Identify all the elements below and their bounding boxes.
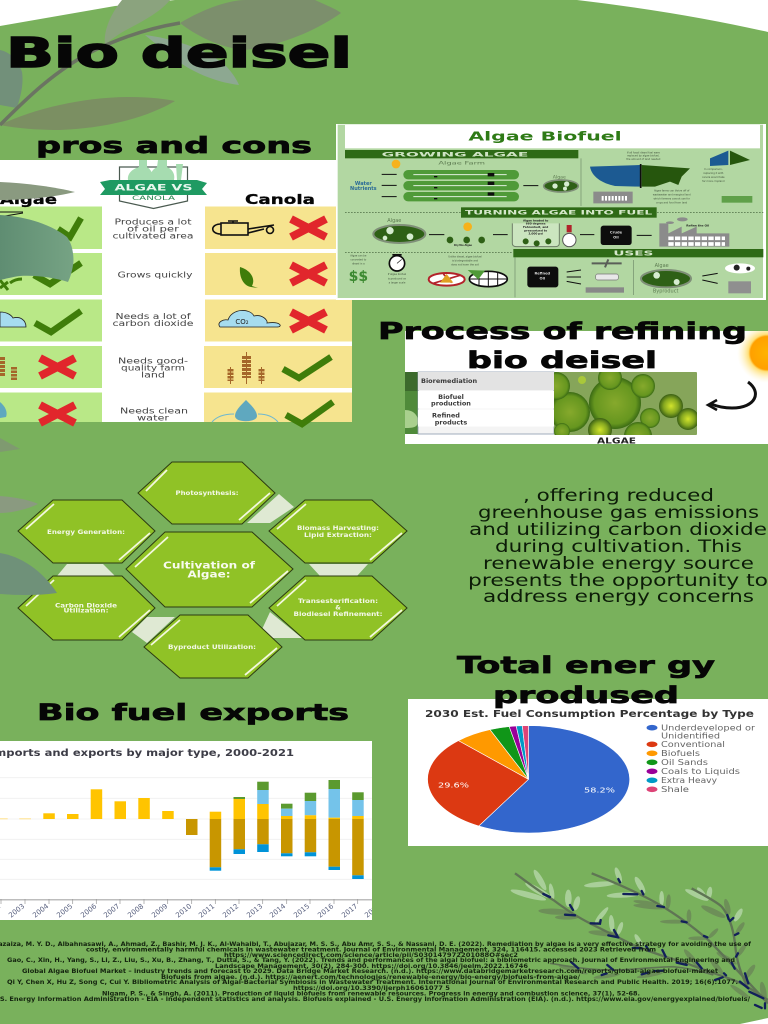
algae farm diagram: Algae Farm [438, 160, 486, 166]
x axis: 2013 [245, 902, 264, 920]
hexagon: cultivation of algae [126, 532, 293, 607]
row labels: of oil per [127, 224, 180, 234]
us map comparison: which farmers cannot use for [653, 197, 691, 201]
x axis: 2007 [102, 902, 121, 920]
legend [646, 724, 756, 794]
legend: Coals to Liquids [661, 767, 740, 776]
hexagon: transesterification and refinement: Transesterification: [298, 597, 378, 605]
icon: canola leaf [240, 267, 258, 288]
facts with stopwatch and icons: Algae can be [350, 254, 367, 258]
badge: algae vs canola: ALGAE VS [114, 184, 192, 194]
text block: references: https://doi.org/10.3390/ijerph16061077 5 [293, 984, 450, 992]
image: algae cells [554, 372, 697, 435]
pie chart: 58.2% [584, 786, 615, 794]
text block: references: Qi Y, Chen X, Hu Z, Song C, Cui Y. Bibliometric Analysis of Algal-Bacterial Symbiosis in Wastewater Treatment. International Journal of Environmental Research and Public Health. 2019; 16(6):1077. [7, 978, 738, 986]
us map comparison: canola would take [702, 175, 725, 179]
right column rows [204, 206, 352, 422]
row labels: land [141, 370, 165, 380]
fuel process diagram: pressurized to [524, 228, 547, 232]
legend: Oil Sands [661, 758, 708, 767]
uses diagram [515, 257, 755, 297]
fuel process diagram: Algae [387, 218, 401, 224]
facts with stopwatch and icons: is produced on [388, 276, 407, 280]
algae farm diagram: Algae [553, 175, 566, 181]
fuel process diagram: Oil [613, 236, 619, 240]
text block: references: https://www.sciencedirect.com/science/article/pii/S030147972201088O#sec2 [224, 951, 518, 959]
us map comparison [590, 150, 752, 205]
icon: wheat [1, 352, 262, 384]
row labels: water [137, 414, 170, 422]
hexagon: transesterification and refinement [269, 576, 407, 640]
hexagon: biomass harvesting [269, 500, 407, 563]
heading: Total energy produced: prodused [493, 683, 679, 709]
x axis: 2009 [150, 902, 169, 920]
x axis: 2008 [126, 902, 145, 920]
algae farm diagram: Nutrients [350, 186, 377, 192]
facts with stopwatch and icons: converted to [350, 258, 367, 262]
table: bioremediation steps: production [431, 400, 471, 408]
fuel process diagram [373, 217, 729, 247]
x axis: 2005 [55, 902, 74, 920]
table: bioremediation steps: Biofuel [438, 393, 464, 401]
panel: fuel consumption pie chart [408, 699, 768, 846]
text block: references: costly, environmentally harmful chemicals in wastewater treatment. Journal of Environmental Management, 324, 116415. accessed 2023 Retrieved from [86, 946, 656, 954]
icons: checks [34, 218, 333, 424]
panel: algae vs canola comparison [0, 160, 352, 424]
small leaf overlay [0, 182, 75, 200]
section bar: growing algae [345, 150, 578, 158]
icon: co2 cloud [219, 310, 280, 327]
algae farm diagram [350, 160, 578, 201]
uses diagram: Byproduct [653, 289, 678, 295]
icon: water drop [0, 400, 278, 422]
panel: algae biofuel infographic [336, 124, 766, 300]
facts with stopwatch and icons: Unlike diesel, algae biofuel [448, 255, 482, 259]
text block: references: Alazaiza, M. Y. D., Albahnasawi, A., Ahmad, Z., Bashir, M. J. K., Al-Wahaibi, T., Abujazar, M. S. S., Abu Amr, S. S., & Nassani, D. E. (2022). Remediation by algae is a very effective strategy for avoiding the use of [0, 940, 751, 948]
heading: Process of refining bio deisel: Process of refining [378, 319, 747, 345]
legend: Unidentified [661, 732, 720, 740]
leaf over carbon dioxide hexagon [0, 553, 57, 595]
icon: sun [738, 331, 768, 382]
decorative branch with leaves behind title [0, 0, 341, 130]
us map comparison: In comparison, [704, 167, 723, 171]
stems [515, 873, 768, 1003]
section bar: uses [513, 249, 763, 258]
x axis: 2010 [174, 902, 193, 920]
x axis: 2017 [340, 902, 359, 920]
facts with stopwatch and icons [349, 254, 507, 287]
hexagon: biomass harvesting: Biomass Harvesting: [297, 524, 379, 532]
text block: benefits paragraph [468, 486, 768, 607]
navy buds [543, 879, 765, 1008]
facts with stopwatch and icons: diesel in a [352, 262, 365, 266]
badge: algae vs canola [100, 160, 207, 208]
x axis: 2004 [31, 902, 51, 920]
legend: Biofuels [661, 749, 700, 758]
heading: Total energy produced: Total ener gy [457, 653, 715, 679]
facts with stopwatch and icons: a larger scale [389, 281, 406, 285]
x axis: 2016 [316, 902, 336, 920]
us map comparison: replaced by algae biofuel, [627, 154, 660, 158]
row labels: quality farm [121, 364, 185, 372]
uses diagram: Oil [540, 276, 545, 280]
us map comparison: the amount of land needed [626, 157, 661, 161]
hexagon: carbon dioxide utilization: Carbon Dioxide [55, 602, 118, 610]
decorative leaves at left middle [0, 438, 38, 513]
fuel process diagram: Dry the Algae [454, 244, 472, 247]
table: bioremediation steps [405, 372, 554, 434]
text block: references: Biofuels from algae. (n.d.). https://aenert.com/technologies/renewable-energy/bio-energy/biofuels-from-algae/ [161, 973, 581, 981]
us map comparison: If all fossil diesel fuel were [627, 150, 660, 154]
us map comparison: Algae farms can thrive off of [654, 189, 689, 193]
icon: oil can [213, 221, 274, 235]
text block: benefits paragraph: greenhouse gas emissions [478, 503, 759, 523]
icons: crosses [40, 219, 326, 423]
text block: references: Nigam, P. S., & Singh, A. (2011). Production of liquid biofuels from renewable resources. Progress in energy and combustion science, 37(1), 52-68. [102, 990, 640, 998]
fuel process diagram: Algae heated to [523, 218, 548, 222]
row labels: Needs clean [120, 406, 188, 416]
hexagon: photosynthesis: Photosynthesis: [176, 489, 238, 497]
text block: benefits paragraph: during cultivation. This [495, 537, 742, 557]
text block: benefits paragraph: presents the opportunity to [468, 571, 768, 591]
x axis [0, 899, 372, 918]
hexagon: cultivation of algae: Cultivation of [163, 560, 256, 572]
row labels: carbon dioxide [112, 319, 194, 328]
fuel process diagram: Refine the Oil [686, 224, 709, 228]
dark leaves [538, 894, 768, 1002]
heading: Process of refining bio deisel: bio deisel [467, 348, 657, 374]
large leaf overlay [0, 215, 73, 282]
facts with stopwatch and icons: If algae biofuel [388, 272, 407, 276]
algae farm diagram: Water [355, 181, 372, 187]
icons: left column partial art [0, 212, 23, 290]
chart title: 2030 Est. Fuel Consumption Percentage by Type [425, 709, 754, 720]
text block: references: Landscape Management, 30(2), 284-300. https://doi.org/10.3846/jeelm.2022.16746 [215, 962, 529, 970]
text block: references [0, 940, 751, 1003]
hexagon: transesterification and refinement: & [335, 604, 341, 612]
heading: Bio deisel: Bio deisel [6, 29, 352, 77]
label: algae: ALGAE [597, 436, 636, 446]
hexagon: photosynthesis [138, 462, 275, 524]
hexagon: byproduct utilization: Byproduct Utilization: [168, 643, 256, 651]
x axis: 2003 [7, 902, 26, 920]
row labels: Needs good- [118, 356, 188, 366]
section bar: growing algae: GROWING ALGAE [382, 151, 528, 158]
arrow: cycle [708, 382, 755, 410]
text block: benefits paragraph: and utilizing carbon dioxide [469, 520, 767, 540]
heading: Process of refining bio deisel [378, 319, 747, 374]
column heading: Canola: Canola [245, 192, 315, 208]
legend: Underdeveloped or [661, 724, 756, 732]
legend: Conventional [661, 740, 725, 749]
connectors between hexagons [57, 494, 368, 643]
pale leaves [510, 867, 744, 947]
row labels: Needs a lot of [116, 312, 191, 321]
legend: Extra Heavy [661, 776, 717, 785]
hexagon: energy generation [18, 500, 155, 563]
x axis: 2012 [221, 902, 240, 920]
facts with stopwatch and icons: is biodegradable and [452, 259, 478, 263]
section bar: uses: USES [613, 250, 654, 258]
hexagon: transesterification and refinement: Biodiesel Refinement: [294, 610, 382, 618]
x axis: 2018 [363, 902, 382, 920]
x axis: 2006 [79, 902, 99, 920]
hexagon: byproduct utilization [144, 615, 282, 678]
table: bioremediation steps: products [435, 418, 467, 426]
us map comparison: far more cropland [702, 179, 725, 183]
text block: benefits paragraph: address energy concerns [483, 587, 754, 607]
text block: benefits paragraph: renewable energy source [483, 554, 754, 574]
section bar: turning algae into fuel: TURNING ALGAE INTO FUEL [465, 210, 652, 217]
x axis: 2011 [197, 902, 216, 920]
infographic title: Algae Biofuel [468, 129, 622, 144]
icon: algae cloud [0, 312, 26, 327]
x axis: 2015 [292, 902, 311, 920]
panel: process of refining [405, 331, 768, 444]
us map comparison: crops and food from land [656, 201, 688, 205]
row labels: Produces a lot [114, 218, 192, 226]
text block: references: Global Algae Biofuel Market – industry trends and forecast to 2029. Data Bridge Market Research. (n.d.). https://www.databridgemarketresearch.com/reports/global-algae-biofuel-market [22, 967, 718, 975]
hexagon: carbon dioxide utilization: Utilization: [64, 606, 108, 614]
uses diagram: Algae [655, 263, 669, 269]
facts with stopwatch and icons: does not harm the soil [451, 263, 479, 267]
text block: benefits paragraph: , offering reduced [523, 486, 714, 506]
icon: co2 cloud: CO₂ [235, 318, 249, 326]
uses diagram: Refined [534, 272, 551, 276]
text block: references: U.S. Energy Information Administration - EIA - independent statistics and analysis. Biofuels explained - U.S. Energy Information Administration (EIA). (n.d.). https://www.eia.gov/energyexplained/biofuels/ [0, 995, 751, 1003]
hexagon: carbon dioxide utilization [18, 576, 155, 640]
text block: references: Gao, C., Xin, H., Yang, S., Li, Z., Liu, S., Xu, B., Zhang, T., Dutta, S., & Tang, Y. (2022). Trends and performances of the algal biofuel: a bibliometric approach. Journal of Environmental Engineering and [7, 956, 735, 964]
table: bioremediation steps: Refined [432, 412, 460, 420]
fuel process diagram: Crude [610, 231, 623, 235]
section bar: turning algae into fuel [461, 207, 657, 218]
hexagon: cultivation of algae: Algae: [188, 570, 230, 580]
pie chart [428, 726, 630, 833]
left column rows [0, 206, 102, 422]
badge: algae vs canola: CANOLA [132, 195, 177, 202]
panel: biofuel imports and exports bar chart [0, 741, 382, 920]
fuel process diagram: Fahrenheit, and [523, 225, 548, 229]
fuel process diagram: 3,000 psi [528, 232, 543, 236]
heading: Bio fuel exports: Bio fuel exports [37, 701, 349, 726]
column heading: Algae: Algae [0, 192, 57, 208]
table: bioremediation steps: Bioremediation [421, 377, 478, 385]
heading: Total energy produced [457, 653, 715, 709]
legend: Shale [661, 785, 689, 794]
pie chart: 29.6% [438, 782, 469, 790]
hexagon: biomass harvesting: Lipid Extraction: [304, 531, 372, 539]
diagram: algae process hexagons [18, 462, 407, 678]
row labels: Grows quickly [118, 270, 193, 280]
row labels: cultivated area [112, 232, 194, 240]
us map comparison: wastewater and marginal land [653, 193, 691, 197]
bars [0, 780, 364, 879]
row labels [112, 218, 194, 422]
decorative olive branch bottom right [510, 867, 768, 1008]
heading: pros and cons: pros and cons [36, 134, 312, 159]
us map comparison: replacing it with [703, 171, 724, 175]
hexagon: energy generation: Energy Generation: [47, 528, 125, 536]
fuel process diagram: 660 degrees [526, 222, 546, 226]
facts with stopwatch and icons: $$ [349, 269, 368, 285]
x axis: 2014 [268, 902, 288, 920]
